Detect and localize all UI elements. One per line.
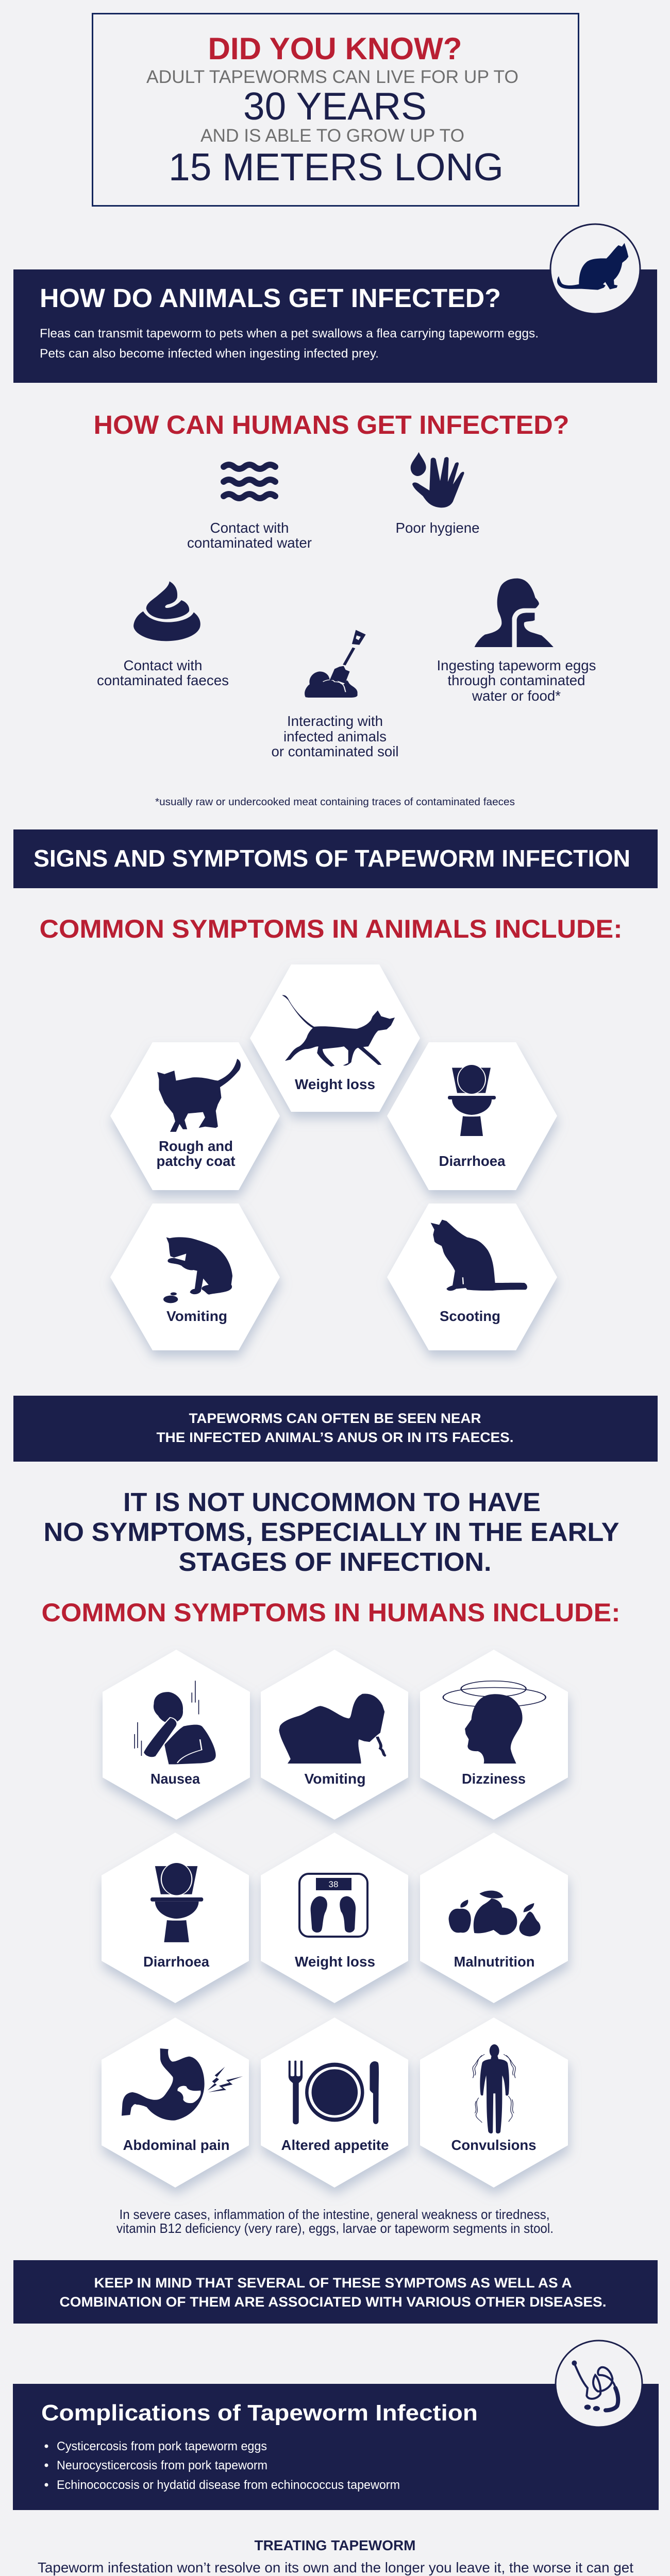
hexagon: weight loss (human): Weight loss [295,1954,375,1970]
hexagon: rough coat: Rough and [159,1138,233,1154]
icon: walking cat [282,995,395,1066]
hexagon: diarrhoea (animal): Diarrhoea [439,1153,506,1169]
hexagon: abdominal pain: Abdominal pain [123,2137,230,2153]
icon: hand and drop [411,452,464,507]
banner: keep in mind [13,2260,658,2324]
stat: 30 years: 30 YEARS [243,84,427,128]
heading: how can humans get infected: HOW CAN HUMANS GET INFECTED? [94,410,569,439]
banner: signs and symptoms: SIGNS AND SYMPTOMS OF TAPEWORM INFECTION [34,845,630,872]
list: complications: Neurocysticercosis from pork tapeworm [57,2459,267,2472]
heading: symptoms in humans: COMMON SYMPTOMS IN HUMANS INCLUDE: [41,1598,621,1627]
hexagon: convulsions: Convulsions [451,2137,536,2153]
hexagon: rough coat [110,1042,280,1190]
panel: how do animals get infected [13,269,657,383]
text: severe cases [116,2207,554,2236]
label: ingesting eggs: water or food* [472,688,561,704]
hexagon: nausea: Nausea [150,1771,200,1787]
text: adult tapeworms: ADULT TAPEWORMS CAN LIVE FOR UP TO [146,67,518,87]
label: interacting: or contaminated soil [271,743,399,759]
label: interacting [271,713,399,759]
label: ingesting eggs [437,657,596,704]
label: contaminated faeces [97,657,229,688]
hexagon: vomiting (human): Vomiting [304,1771,366,1787]
icon: shaking body [473,2044,515,2133]
hexagon: altered appetite [261,2018,408,2188]
label: poor hygiene: Poor hygiene [396,520,479,536]
footnote: *usually raw or undercooked meat containing traces of contaminated faeces [155,796,515,808]
icon: bathroom scale: 38 [329,1879,338,1889]
hexagon: diarrhoea (human) [102,1833,249,2003]
hexagon: dizziness: Dizziness [462,1771,526,1787]
hexagon: nausea [103,1650,250,1820]
icon: faeces [133,581,200,641]
icon: worm in circle [556,2341,642,2427]
banner: tapeworms seen near anus: TAPEWORMS CAN OFTEN BE SEEN NEAR [189,1411,481,1426]
hexagon: dizziness [420,1650,568,1820]
heading: symptoms in animals: COMMON SYMPTOMS IN ANIMALS INCLUDE: [39,914,623,943]
text: fleas: Fleas can transmit tapeworm to pets when a pet swallows a flea carrying tapeworm eggs. [40,327,539,341]
hexagon: rough coat: patchy coat [157,1153,235,1169]
list: complications: Cysticercosis from pork tapeworm eggs [57,2439,267,2453]
label: contaminated water: Contact with [210,520,289,536]
label: contaminated faeces: Contact with [124,657,202,673]
text: able to grow: AND IS ABLE TO GROW UP TO [200,126,464,146]
section: treating tapeworm [38,2537,633,2575]
icon: dizzy head [443,1681,546,1764]
hexagon: malnutrition [420,1833,568,2003]
hexagon: vomiting (human) [261,1650,408,1820]
icon: vomiting person [279,1693,386,1764]
icon: rough cat [157,1059,241,1132]
hexagon: scooting: Scooting [440,1308,500,1324]
text: severe cases: In severe cases, inflammation of the intestine, general weakness or tiredness, [120,2207,549,2222]
icon: fruits [449,1891,541,1937]
hexagon: diarrhoea (animal) [387,1042,557,1190]
icon: stomach [122,2048,243,2121]
label: ingesting eggs: through contaminated [447,672,585,688]
hexagon: abdominal pain [102,2018,249,2188]
panel: did you know [93,13,578,206]
heading: no symptoms: STAGES OF INFECTION. [178,1547,492,1577]
hexagon: malnutrition: Malnutrition [454,1954,535,1970]
hexagon: vomiting (animal) [110,1204,280,1350]
hexagon: weight loss (human) [261,1833,408,2003]
icon: toilet [448,1064,496,1136]
icon: scooting cat [431,1219,527,1291]
label: interacting: infected animals [283,728,387,744]
panel: complications [13,2384,659,2510]
heading: complications: Complications of Tapeworm Infection [41,2400,478,2426]
heading: no symptoms [43,1487,619,1577]
text: infected prey: Pets can also become infected when ingesting infected prey. [40,347,379,361]
banner: keep in mind: KEEP IN MIND THAT SEVERAL OF THESE SYMPTOMS AS WELL AS A [94,2275,572,2291]
label: interacting: Interacting with [287,713,383,729]
banner: signs and symptoms [13,829,658,888]
hexagon: convulsions [420,2018,568,2188]
banner: tapeworms seen near anus [13,1396,658,1462]
list: complications: Echinococcosis or hydatid disease from echinococcus tapeworm [57,2478,400,2492]
heading: no symptoms: IT IS NOT UNCOMMON TO HAVE [123,1487,541,1517]
banner: keep in mind: COMBINATION OF THEM ARE ASSOCIATED WITH VARIOUS OTHER DISEASES. [60,2294,606,2310]
hexagon: vomiting (animal): Vomiting [166,1308,227,1324]
text: severe cases: vitamin B12 deficiency (very rare), eggs, larvae or tapeworm segments in stool. [116,2221,554,2236]
icon: shovel in soil [305,630,366,698]
hexagon: altered appetite: Altered appetite [281,2137,389,2153]
section: treating tapeworm: Tapeworm infestation won’t resolve on its own and the longer you leave it, the worse it can get [38,2560,633,2575]
stat: 15 meters long: 15 METERS LONG [169,145,504,189]
icon: bathroom scale [299,1874,367,1937]
list: complications [44,2439,400,2492]
banner: tapeworms seen near anus: THE INFECTED ANIMAL’S ANUS OR IN ITS FAECES. [157,1430,513,1445]
icon: vomiting cat [163,1237,232,1303]
hexagon: diarrhoea (human): Diarrhoea [143,1954,209,1970]
heading: animals infected: HOW DO ANIMALS GET INFECTED? [40,283,501,313]
label: contaminated water: contaminated water [187,535,312,551]
hexagon: weight loss (animal): Weight loss [295,1076,375,1092]
hexagon: weight loss (animal) [250,964,420,1112]
icon: water waves [224,465,275,498]
heading: did you know: DID YOU KNOW? [208,31,462,66]
label: contaminated water [187,520,312,551]
icon: head and throat [475,579,554,647]
hexagon: scooting [387,1204,557,1350]
section: treating tapeworm: TREATING TAPEWORM [255,2537,415,2553]
icon: plate and cutlery [289,2061,379,2124]
label: contaminated faeces: contaminated faeces [97,672,229,688]
heading: no symptoms: NO SYMPTOMS, ESPECIALLY IN THE EARLY [43,1517,619,1547]
label: ingesting eggs: Ingesting tapeworm eggs [437,657,596,673]
icon: nausea person [135,1681,216,1764]
icon: cat in circle [550,224,640,314]
icon: toilet [150,1862,203,1942]
